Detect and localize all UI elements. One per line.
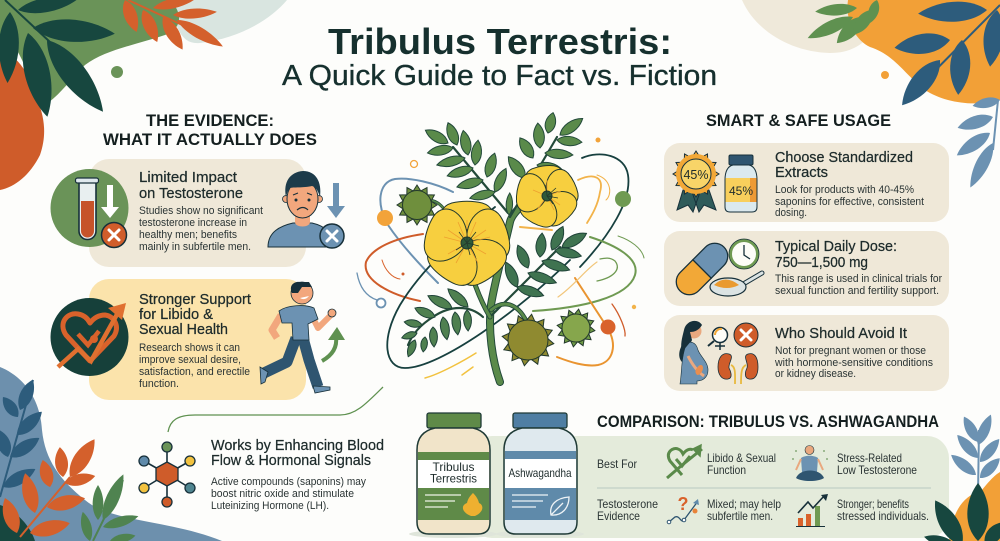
- text block: healthy men; benefits: [139, 229, 237, 241]
- flowers: [419, 163, 583, 292]
- row: best for: Best For: [597, 457, 637, 471]
- icon: running man with up arrow: [260, 282, 345, 393]
- bottle: tribulus terrestris: Tribulus: [432, 460, 474, 474]
- heading: Flow & Hormonal Signals: [211, 452, 371, 469]
- text block: satisfaction, and erectile: [139, 366, 250, 378]
- icon: molecule: [139, 442, 195, 507]
- heading: the evidence: THE EVIDENCE:: [146, 111, 274, 130]
- icon: rising bar chart: [796, 494, 828, 526]
- stems: [408, 137, 560, 382]
- icon: worried man with down arrow: [268, 171, 345, 248]
- title: [282, 21, 717, 92]
- row: testosterone evidence: [597, 494, 929, 526]
- orbit lines: [357, 154, 644, 378]
- block: works by enhancing blood flow: [139, 437, 384, 512]
- central plant illustration: [357, 111, 644, 382]
- text block: This range is used in clinical trials for: [775, 273, 942, 285]
- panel: stronger support for libido: [50, 279, 345, 400]
- row: best for: Function: [707, 463, 746, 477]
- bottle: tribulus terrestris: Terrestris: [430, 472, 477, 486]
- text block: [139, 205, 264, 253]
- text block: Studies show no significant: [139, 205, 264, 217]
- heading: on Testosterone: [139, 185, 243, 202]
- text block: improve sexual desire,: [139, 354, 241, 366]
- bottle: ashwagandha: Ashwagandha: [508, 466, 572, 480]
- heading: Extracts: [775, 164, 828, 181]
- row: best for: Low Testosterone: [837, 463, 917, 477]
- leaves: [423, 111, 586, 215]
- icon: capsule, clock and spoon: [671, 238, 762, 300]
- heading: the evidence: WHAT IT ACTUALLY DOES: [103, 130, 317, 149]
- row: best for: Libido & Sexual: [707, 451, 776, 465]
- text block: [775, 184, 925, 219]
- row: testosterone evidence: Evidence: [597, 509, 640, 523]
- icon: green heart check: [667, 445, 702, 478]
- text block: [774, 345, 933, 380]
- text block: [139, 342, 250, 390]
- heading: Limited Impact: [139, 169, 238, 186]
- panel: limited impact on testosterone: [50, 159, 345, 267]
- heading: [775, 238, 897, 271]
- icon: question mark with trend line: [667, 494, 699, 524]
- text block: Look for products with 40-45%: [775, 184, 914, 196]
- comparison table: [597, 445, 931, 526]
- icon: 45% rosette and bottle: 45%: [729, 184, 753, 198]
- heading: Typical Daily Dose:: [775, 238, 897, 255]
- heading: for Libido &: [139, 306, 213, 323]
- heading: Who Should Avoid It: [775, 325, 908, 342]
- text block: boost nitric oxide and stimulate: [211, 488, 354, 500]
- text block: saponins for effective, consistent: [775, 196, 925, 208]
- spiky fruits: [397, 185, 597, 369]
- decoration: bottom-left foliage: [0, 367, 222, 541]
- text block: sexual function and fertility support.: [775, 285, 939, 297]
- title: Tribulus Terrestris:: [328, 21, 672, 62]
- heading: Stronger Support: [139, 291, 252, 308]
- heading: Sexual Health: [139, 321, 228, 338]
- heading: comparison: COMPARISON: TRIBULUS VS. ASHWAGANDHA: [597, 413, 939, 431]
- decoration: top-right foliage: [742, 0, 1000, 190]
- heading: the evidence: [103, 111, 317, 149]
- comparison panel background: [470, 436, 949, 538]
- row: testosterone evidence: Mixed; may help: [707, 497, 781, 511]
- row: testosterone evidence: Stronger; benefits: [837, 497, 909, 511]
- text block: with hormone-sensitive conditions: [774, 357, 933, 369]
- decoration: bottom-right foliage: [923, 413, 1000, 541]
- text block: Luteinizing Hormone (LH).: [211, 500, 329, 512]
- heading: Choose Standardized: [775, 149, 913, 166]
- panel: typical daily dose: [664, 231, 949, 306]
- bottle: ashwagandha: [496, 413, 584, 538]
- row: testosterone evidence: stressed individuals.: [837, 509, 929, 523]
- title: A Quick Guide to Fact vs. Fiction: [282, 60, 717, 92]
- text block: Not for pregnant women or those: [775, 345, 926, 357]
- heading: [211, 437, 384, 469]
- text block: mainly in subfertile men.: [139, 241, 251, 253]
- text block: [775, 273, 942, 297]
- row: best for: [597, 445, 917, 481]
- panel: who should avoid it: [664, 315, 949, 391]
- heading: [139, 291, 252, 338]
- divider: [597, 487, 931, 489]
- text block: or kidney disease.: [775, 368, 856, 380]
- row: best for: Stress-Related: [837, 451, 902, 465]
- icon: pregnant woman, female symbol, kidneys: [679, 321, 758, 384]
- icon: 45% rosette and bottle: 45%: [683, 168, 709, 182]
- heading: [139, 169, 243, 202]
- connector curve: [168, 387, 383, 432]
- row: testosterone evidence: Testosterone: [597, 497, 658, 511]
- heading: [775, 149, 913, 181]
- heading: smart and safe usage: SMART & SAFE USAGE: [706, 111, 891, 130]
- orbit nodes: [376, 138, 636, 334]
- text block: [211, 476, 366, 512]
- text block: Active compounds (saponins) may: [211, 476, 366, 488]
- text block: Research shows it can: [139, 342, 240, 354]
- icon: test tube with down arrow: [50, 169, 128, 248]
- heading: 750—1,500 mg: [775, 254, 868, 271]
- icon: 45% rosette and bottle: [673, 151, 757, 212]
- icon: question mark with trend line: ?: [678, 494, 688, 514]
- icon: heart with rising arrow: [50, 298, 128, 376]
- icon: meditating person: [793, 446, 827, 481]
- heading: Works by Enhancing Blood: [211, 437, 384, 454]
- text block: dosing.: [775, 207, 807, 219]
- row: testosterone evidence: subfertile men.: [707, 509, 773, 523]
- decoration: top-left foliage: [0, 0, 287, 190]
- bottle: tribulus terrestris: [409, 413, 497, 538]
- text block: function.: [139, 378, 179, 390]
- text block: testosterone increase in: [139, 217, 247, 229]
- panel: choose standardized extracts: [664, 143, 949, 222]
